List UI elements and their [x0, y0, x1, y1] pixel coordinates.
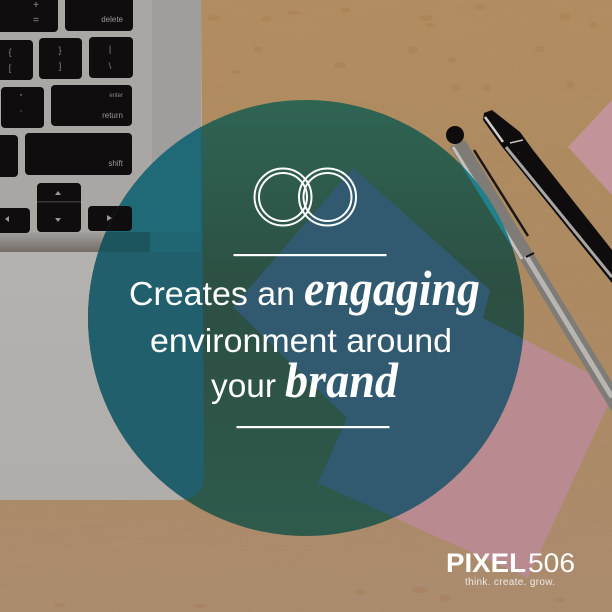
sticky notes: pink stack: [233, 168, 612, 578]
pen: black: [483, 110, 612, 283]
pen: silver stylus: [446, 126, 612, 412]
key labels: ]: [59, 61, 61, 71]
key labels: ": [20, 93, 23, 102]
bottom divider: [236, 426, 390, 428]
key labels: |: [109, 44, 111, 54]
key labels: delete: [101, 15, 124, 24]
top divider: [234, 254, 386, 256]
headline: [129, 260, 480, 408]
logo: Pixel506: think. create. grow.: [465, 577, 555, 588]
key labels: [5, 0, 124, 222]
keyboard keys: [0, 0, 133, 233]
headline: environment around: [150, 322, 452, 359]
key labels: =: [33, 15, 39, 26]
teal circle overlay: [88, 100, 524, 536]
key labels: [: [9, 63, 12, 73]
laptop: [0, 0, 204, 500]
key labels: {: [8, 47, 12, 57]
key labels: +: [33, 0, 39, 11]
logo: Pixel506: 506: [528, 548, 575, 578]
headline: engaging: [304, 260, 480, 316]
key labels: }: [58, 45, 62, 55]
headline: Creates an: [129, 275, 295, 312]
key labels: return: [102, 111, 123, 120]
key labels: shift: [108, 159, 124, 168]
logo: Pixel506: PIXEL: [446, 548, 526, 578]
headline: your: [211, 367, 276, 404]
key labels: \: [109, 61, 112, 71]
sticky note: top right: [568, 100, 612, 195]
key labels: ': [20, 109, 22, 118]
logo: Pixel506: [446, 548, 575, 588]
headline: brand: [285, 352, 399, 408]
key labels: enter: [109, 93, 123, 99]
icon: interlocked rings: [254, 168, 356, 226]
